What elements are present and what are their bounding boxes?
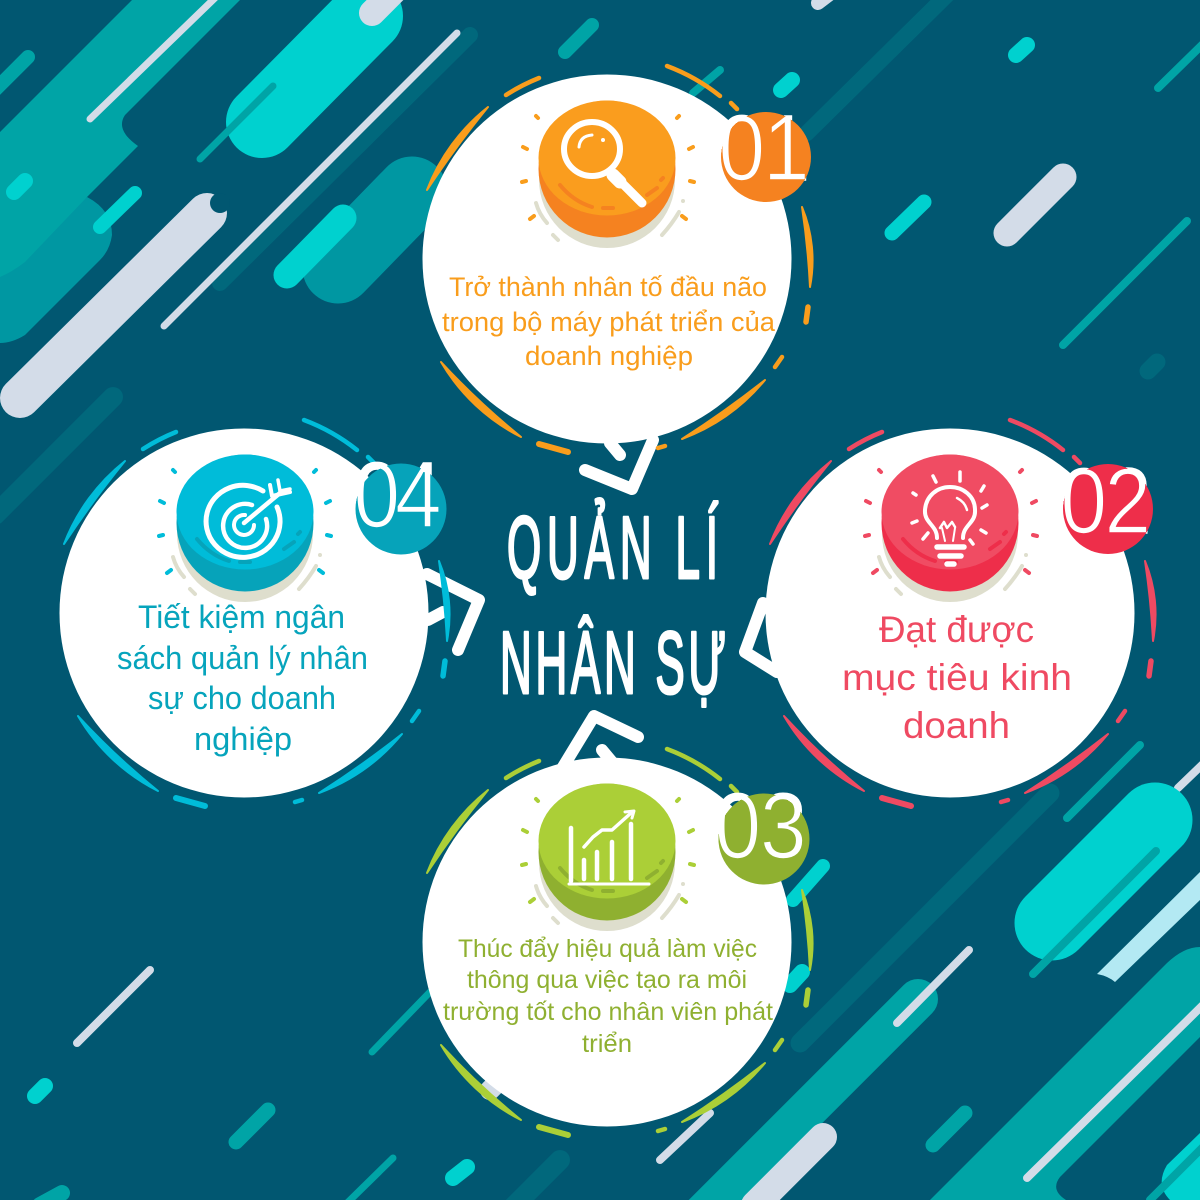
bubble circle 03 [422, 758, 792, 1126]
bubble group 02 [766, 420, 1156, 806]
text 03: thông qua việc tạo ra môi [467, 966, 747, 994]
speech tail 03 [563, 716, 638, 767]
text 04: Tiết kiệm ngân [138, 599, 345, 635]
title: QUẢN LÍ [507, 498, 718, 597]
bubble circle 04 [60, 428, 428, 798]
icon: growth chart [569, 811, 649, 884]
dashed ring 04 [64, 420, 450, 806]
text 02: doanh [903, 705, 1010, 746]
title: NHÂN SỰ [500, 613, 726, 712]
button 04 [159, 454, 331, 602]
text 02: Đạt được [879, 609, 1034, 650]
text 04 [117, 599, 368, 757]
bubble circle 02 [766, 428, 1134, 798]
text 03: trường tốt cho nhân viên phát [443, 998, 773, 1026]
icon: magnifier [564, 122, 642, 203]
dashed ring 01 [427, 66, 813, 452]
panel: 01 orange [422, 66, 813, 489]
text 01 [442, 272, 776, 371]
dashed ring 02 [770, 420, 1156, 806]
number 02: 02 [1061, 449, 1151, 553]
number 04: 04 [354, 443, 442, 547]
speech tail 04 [427, 574, 479, 650]
title [500, 498, 726, 712]
speech tail 02 [745, 603, 777, 672]
bubble group 03 [422, 749, 813, 1135]
icon: light bulb [912, 472, 987, 564]
panel: 04 blue [60, 420, 479, 806]
text 04: nghiệp [194, 721, 292, 757]
icon: target with arrow [206, 480, 290, 557]
number 03: 03 [714, 774, 807, 878]
text 03: Thúc đẩy hiệu quả làm việc [458, 935, 757, 963]
button 01 [522, 100, 694, 248]
text 01: trong bộ máy phát triển của [442, 307, 776, 337]
panel: 02 red [745, 420, 1156, 806]
text 04: sách quản lý nhân [117, 640, 368, 676]
text 01: doanh nghiệp [525, 341, 693, 371]
panel: 03 green [422, 716, 813, 1135]
text 02: mục tiêu kinh [842, 657, 1072, 698]
bubble group 01 [422, 66, 813, 452]
text 02 [842, 609, 1072, 746]
text 03: triển [582, 1030, 632, 1058]
number 01: 01 [719, 96, 810, 200]
text 01: Trở thành nhân tố đầu não [449, 272, 767, 302]
text 03 [443, 935, 773, 1058]
button 02 [865, 454, 1037, 602]
dashed ring 03 [427, 749, 813, 1135]
bubble group 04 [60, 420, 450, 806]
bubble circle 01 [422, 74, 792, 444]
button 03 [522, 784, 694, 931]
speech tail 01 [585, 440, 653, 489]
text 04: sự cho doanh [148, 680, 336, 716]
